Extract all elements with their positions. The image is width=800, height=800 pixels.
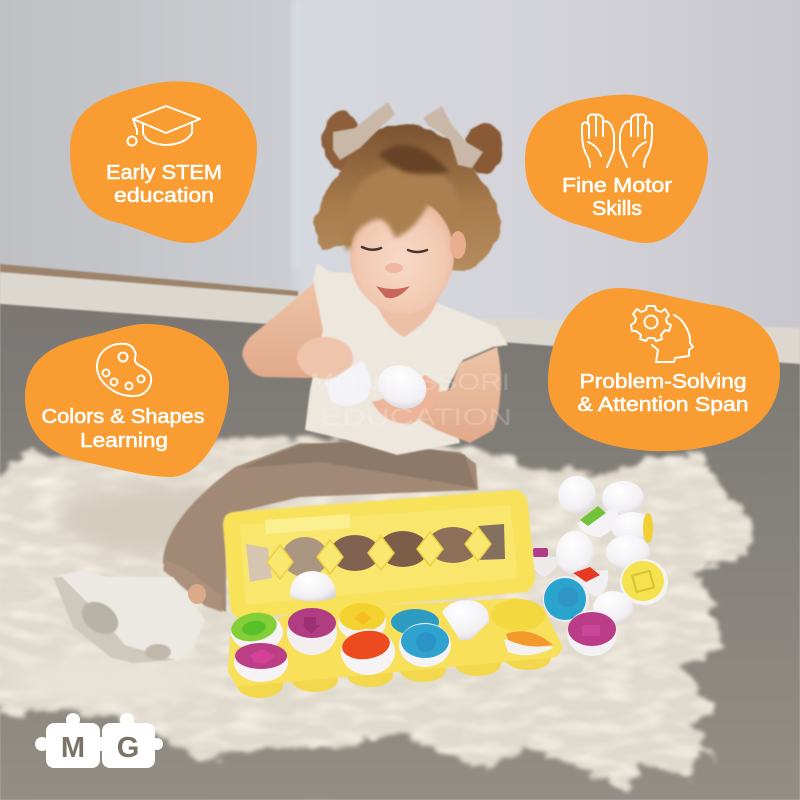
- ear: [450, 231, 466, 259]
- eyes: [362, 247, 427, 252]
- badge: Colors and Shapes Learning: [25, 324, 229, 477]
- trouser cuff: [163, 560, 222, 612]
- watermark: MONTESSORI: [310, 369, 510, 396]
- magenta egg: [287, 609, 337, 655]
- blue egg: [543, 576, 589, 622]
- carton lid: [223, 490, 535, 619]
- icon: gear and head: [631, 306, 693, 362]
- arm left: [242, 280, 345, 378]
- shirt: [305, 263, 508, 455]
- badge: Colors and Shapes Learning: Learning: [80, 430, 168, 452]
- arm right: [420, 347, 501, 443]
- trouser waist ruffle: [240, 440, 476, 488]
- mouth: [376, 286, 410, 298]
- bow left: [333, 102, 395, 160]
- logo: MG puzzle pieces: M: [61, 732, 85, 764]
- red half: [573, 570, 608, 597]
- text: Colors & Shapes: [42, 406, 204, 428]
- lid diamonds: [267, 527, 491, 579]
- fringe: [344, 165, 461, 250]
- blob: [70, 81, 257, 243]
- sneaker: [53, 570, 205, 663]
- badge: Early STEM education: [70, 81, 257, 243]
- badge: Fine Motor Skills: [525, 95, 708, 243]
- badge: Problem-Solving and Attention Span: & Attention Span: [578, 394, 748, 416]
- pigtail left: [323, 111, 361, 171]
- crown shadow: [378, 145, 450, 174]
- badge: Fine Motor Skills: Skills: [592, 198, 642, 220]
- carton base: [228, 598, 563, 687]
- yellow-rimmed white egg: [611, 512, 653, 542]
- fluffy rug: [0, 437, 753, 793]
- blob: [25, 324, 229, 477]
- blob: [525, 95, 708, 243]
- green half: [577, 507, 618, 537]
- magenta front egg: [234, 642, 288, 682]
- eggs in carton: [229, 571, 553, 682]
- text: Problem-Solving: [580, 371, 746, 393]
- yellow egg: [338, 603, 386, 641]
- badge: Early STEM education: education: [114, 185, 214, 207]
- red egg: [341, 629, 395, 675]
- logo: MG puzzle pieces: G: [117, 732, 139, 764]
- egg carton: [223, 490, 563, 698]
- white egg: [442, 600, 489, 640]
- bow right: [423, 106, 483, 168]
- blue back egg: [391, 609, 439, 635]
- icon: graduation cap: [128, 106, 200, 146]
- carton bumps: [237, 646, 551, 698]
- lid inner panel: [240, 505, 518, 605]
- orange half egg: [504, 636, 553, 655]
- nose: [385, 263, 403, 273]
- sole: [53, 577, 175, 663]
- hair: [315, 123, 500, 272]
- magenta egg: [567, 610, 617, 656]
- yellow empty cup: [491, 599, 545, 631]
- neck: [370, 290, 440, 337]
- watermark: EDUCATION: [320, 404, 512, 431]
- blue front egg: [399, 623, 451, 667]
- yellow egg: [620, 559, 668, 605]
- green egg: [231, 613, 283, 651]
- girl: [53, 102, 508, 663]
- blob: [548, 288, 780, 451]
- text: Fine Motor: [562, 175, 672, 197]
- trousers: [163, 443, 478, 612]
- lid holes: [246, 524, 505, 582]
- egg on lid: [290, 571, 336, 602]
- hand right: [372, 375, 440, 424]
- icon: palette: [97, 344, 151, 396]
- pigtail right: [465, 122, 503, 174]
- hand left: [297, 337, 353, 379]
- watermark: [310, 369, 512, 431]
- egg half held: [326, 360, 371, 406]
- badge: Problem-Solving and Attention Span: [548, 288, 780, 451]
- egg held: [370, 357, 434, 417]
- logo: MG puzzle pieces: [35, 713, 163, 768]
- lid highlight: [265, 514, 351, 534]
- scattered eggs: [543, 476, 668, 656]
- text: Early STEM: [106, 162, 222, 184]
- icon: hands: [582, 114, 652, 167]
- face: [350, 196, 454, 314]
- ankle: [188, 584, 206, 604]
- scattered half egg behind lid: [530, 548, 560, 577]
